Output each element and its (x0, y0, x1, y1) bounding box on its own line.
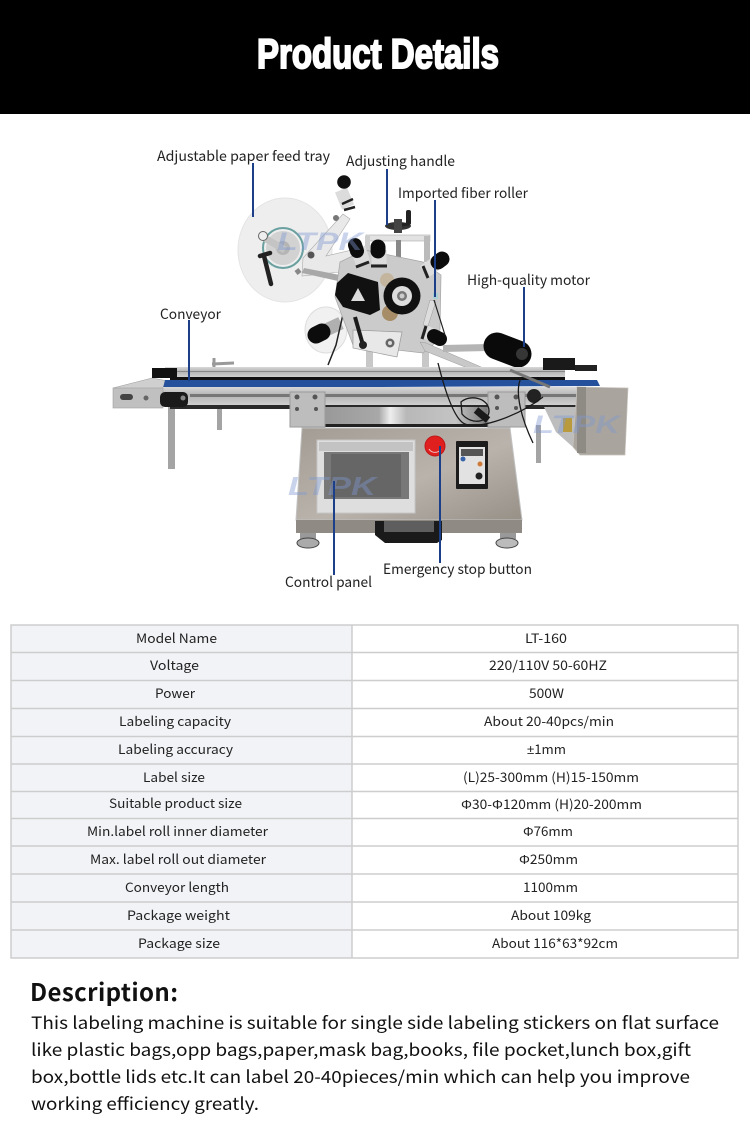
row: Model Name (136, 628, 567, 647)
callout: Emergency stop button: Emergency stop button (383, 559, 532, 579)
row: Labeling accuracy (118, 739, 566, 758)
callout: Control panel: Control panel (285, 572, 372, 592)
watermark text: LTPK (277, 228, 366, 256)
callout: High-quality motor: High-quality motor (467, 270, 591, 290)
row: Voltage: Voltage (150, 655, 199, 674)
row: Min.label roll inner diameter: Min.label roll inner diameter (87, 821, 269, 840)
description heading: Description: (30, 973, 178, 1008)
icon: main fiber roller (380, 273, 420, 321)
specification table (11, 625, 738, 958)
icon: large label feed tray disc (238, 198, 332, 302)
icon: feet (297, 533, 518, 548)
row: Labeling capacity: Labeling capacity (119, 711, 231, 730)
icon: main head plate (335, 250, 441, 357)
row: Package size (138, 933, 618, 952)
icon: small lower roll disc (305, 307, 347, 365)
header band (0, 0, 750, 114)
icon: control base (296, 428, 522, 543)
watermark text: LTPK (533, 411, 623, 439)
icon: black drive housing (335, 273, 380, 315)
icon: support legs (168, 348, 541, 469)
row: Suitable product size (109, 793, 642, 813)
callout: Adjustable paper feed tray: Adjustable paper feed tray (157, 146, 331, 166)
icon: peel plate (420, 293, 488, 370)
icon: wiring (438, 363, 543, 443)
icon: touch screen control panel (317, 440, 415, 513)
icon: mounting brackets (290, 392, 525, 427)
watermark text: LTPK (288, 471, 379, 501)
callout: Imported fiber roller: Imported fiber roller (398, 183, 529, 203)
row: Conveyor length (125, 877, 578, 896)
row: Model Name: Model Name (136, 628, 217, 647)
callout leaders (189, 163, 524, 575)
machine illustration (113, 175, 628, 548)
row: Label size: Label size (143, 767, 205, 786)
description text: like plastic bags,opp bags,paper,mask bag,books, file pocket,lunch box,gift (31, 1036, 692, 1061)
title: Product Details (257, 30, 499, 77)
icon: emergency stop button (425, 436, 445, 456)
row: Voltage: 220/110V 50-60HZ (489, 655, 607, 674)
description text: working efficiency greatly. (31, 1090, 259, 1115)
callout: Conveyor: Conveyor (160, 304, 222, 324)
row: Package weight (127, 905, 592, 924)
icon: conveyor belt (113, 358, 600, 409)
callout: Adjusting handle: Adjusting handle (346, 151, 455, 171)
description text: box,bottle lids etc.It can label 20-40pieces/min which can help you improve (31, 1063, 690, 1088)
row: Conveyor length: Conveyor length (125, 877, 229, 896)
row: Min.label roll inner diameter (87, 821, 573, 840)
row: Suitable product size: Suitable product size (109, 793, 242, 812)
row: Package size: About 116*63*92cm (492, 933, 618, 952)
row: Power: 500W (529, 683, 565, 702)
row: Labeling accuracy: Labeling accuracy (118, 739, 233, 758)
row: Suitable product size: Φ30-Φ120mm (H)20-200mm (461, 794, 642, 813)
row: Package weight: Package weight (127, 905, 230, 924)
row: Package weight: About 109kg (511, 905, 592, 924)
icon: upper tension rollers (355, 245, 442, 339)
icon: swing arm (296, 175, 358, 281)
icon: right end cover (544, 387, 628, 455)
row: Max. label roll out diameter: Max. label roll out diameter (90, 849, 267, 868)
icon: top frame and adjusting handle (365, 210, 430, 262)
row: Conveyor length: 1100mm (523, 877, 578, 896)
row: Model Name: LT-160 (525, 628, 567, 647)
icon: centre chassis (325, 407, 488, 427)
row: Max. label roll out diameter: Φ250mm (519, 849, 578, 868)
row: Label size: (L)25-300mm (H)15-150mm (463, 767, 639, 786)
row: Labeling capacity: About 20-40pcs/min (484, 711, 614, 730)
row: Min.label roll inner diameter: Φ76mm (523, 821, 573, 840)
watermark text (277, 228, 623, 501)
description text: This labeling machine is suitable for single side labeling stickers on flat surface (31, 1009, 719, 1034)
description text (31, 1009, 719, 1115)
icon: high-quality motor (497, 346, 528, 360)
row: Package size: Package size (138, 933, 220, 952)
row: Voltage (150, 655, 607, 674)
row: Power (155, 683, 565, 702)
row: Max. label roll out diameter (90, 849, 578, 868)
row: Labeling accuracy: ±1mm (527, 739, 566, 758)
row: Labeling capacity (119, 711, 614, 730)
icon: digital controller (456, 441, 488, 489)
row: Power: Power (155, 683, 196, 702)
row: Label size (143, 767, 639, 786)
